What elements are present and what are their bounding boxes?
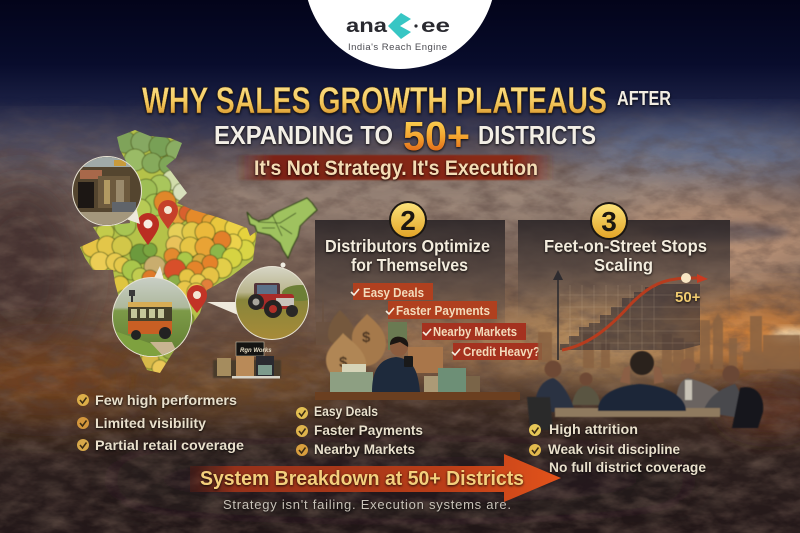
distributor at desk with phone [372,337,420,392]
bullet: limited visibility: Limited visibility [95,415,206,431]
map pin: north [158,200,178,229]
money bags: $ [339,354,348,371]
chart curve [562,278,700,350]
India district map [80,130,318,373]
panel 3: feet on street [518,202,800,430]
map pin: south-east [187,285,207,313]
bullet: few high performers: Few high performers [95,392,237,408]
logo wordmark: ee [421,16,450,37]
panel 3 heading [544,236,707,275]
panel 2 heading [325,236,490,275]
chart label 50+: 50+ [675,289,701,306]
bullet: partial retail coverage: Partial retail coverage [95,437,244,453]
desk [315,392,520,400]
panel 3 heading: Scaling [594,255,653,275]
subtitle banner: It's Not Strategy. It's Execution [254,157,538,180]
bullet: no full district coverage: No full district coverage [549,459,706,475]
badge 2 [389,201,427,239]
panel 2 heading: Distributors Optimize [325,236,490,256]
logo wordmark [346,13,450,39]
chip: nearby markets: Nearby Markets [433,324,517,339]
title line 2: DISTRICTS [478,120,596,150]
chip: easy deals: Easy Deals [363,285,424,300]
table [555,408,720,417]
person: seated behind left [572,372,600,405]
frustrated team at table [527,351,763,430]
title word: after: AFTER [617,88,671,110]
callout photo: retail shop [70,155,145,227]
person: right talking [676,358,724,410]
system breakdown arrow [190,454,561,502]
storefront illustration [213,342,281,378]
closing tagline: Strategy isn't failing. Execution systems are. [223,497,511,512]
bullet list: feet-on-street column [529,421,706,475]
bullet list: map column [77,392,244,453]
person: far right [703,366,743,418]
bullet: easy deals: Easy Deals [314,403,378,419]
title line 2: EXPANDING TO [214,120,393,150]
logo wordmark: ana [346,16,388,37]
badge 3: 3 [601,206,617,237]
warehouse shelves and goods [388,322,443,373]
panel 3 heading: Feet-on-Street Stops [544,236,707,256]
money bags [326,310,386,382]
growth chart [553,270,708,360]
storefront illustration: Rgn Works [240,348,272,354]
person: head in hands [598,351,686,411]
panel 2: distributors [315,201,542,400]
bullet: weak visit discipline: Weak visit discipline [548,441,680,457]
chairs [527,397,553,430]
title [142,80,607,159]
skyline [538,313,800,374]
map pin: west [137,213,159,245]
panel 2 heading: for Themselves [351,255,468,275]
chip: credit heavy: Credit Heavy? [463,344,540,359]
title line 2: 50+ [403,113,470,159]
money bags: $ [362,329,371,346]
cash stacks [330,364,480,392]
badge 3 [590,202,628,240]
logo badge [304,0,496,69]
chart axis [557,278,559,360]
callout photo: red tractor [207,266,318,341]
chip: faster payments: Faster Payments [396,303,490,318]
person: left [535,360,575,412]
bullet: high attrition: High attrition [549,421,638,437]
title line 2 [214,113,596,159]
small dot near north-east map [280,262,286,268]
callout photo: bus in green field [112,266,192,358]
badge 2: 2 [400,205,416,236]
title line 1: WHY SALES GROWTH PLATEAUS [142,80,607,121]
logo tagline: India's Reach Engine [348,42,447,53]
map: north-east states [247,198,317,258]
bullet: nearby markets: Nearby Markets [314,441,415,457]
system breakdown arrow: System Breakdown at 50+ Districts [200,468,524,490]
bullet: faster payments: Faster Payments [314,422,423,438]
bullet list: distributors column [296,403,423,457]
panel 2 skyline [316,288,330,345]
